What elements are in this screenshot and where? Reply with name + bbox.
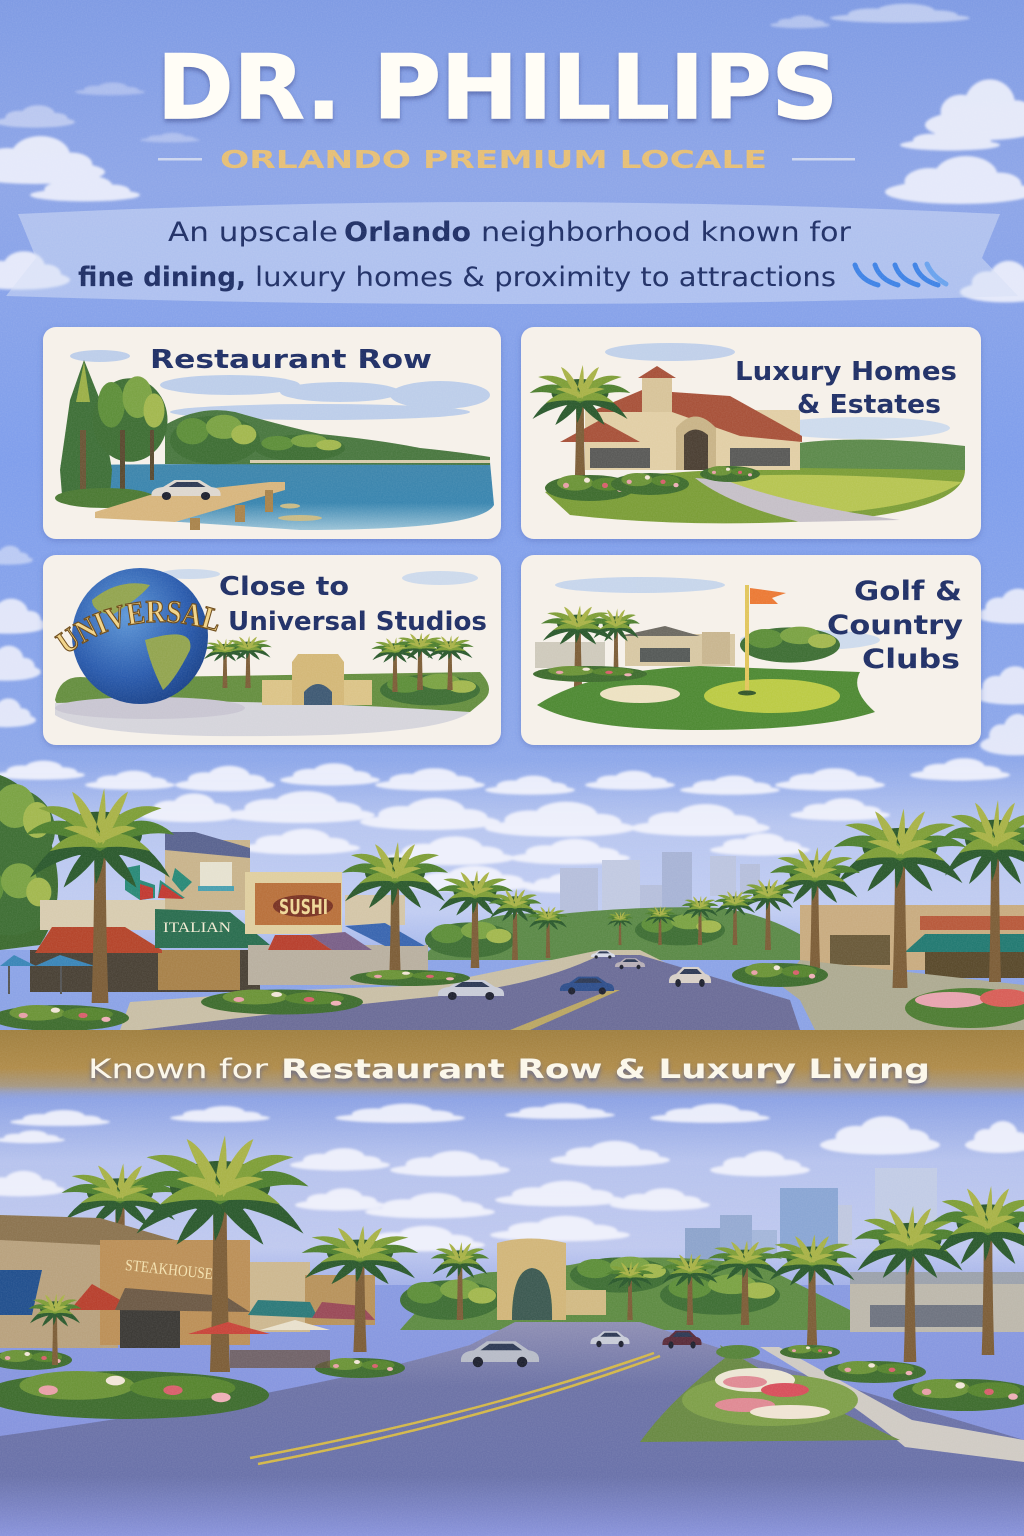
landscaping beds [0, 1294, 1024, 1419]
patio seating [188, 1320, 330, 1368]
title: DR. PHILLIPS [157, 36, 838, 139]
icon: blue waves [855, 264, 946, 285]
shrubs [533, 666, 647, 682]
palms [203, 633, 474, 692]
banner text: Known for [88, 1054, 269, 1085]
panel: Close to Universal Studios: UNIVERSAL [54, 600, 219, 652]
palm trees left [26, 788, 568, 1003]
clouds: side margins [0, 546, 1024, 755]
car on dock [151, 480, 221, 500]
card title: Golf & [854, 576, 962, 607]
background trees [740, 627, 840, 663]
background treeline [400, 1257, 890, 1330]
card title [735, 357, 957, 420]
sand bunker [600, 685, 680, 703]
card title: Close to [219, 572, 349, 602]
distant trees [420, 907, 840, 960]
card title: Clubs [862, 644, 960, 675]
STEAKHOUSE sign: STEAKHOUSE [124, 1257, 214, 1283]
landscaping and flowers [0, 963, 1024, 1031]
lawn [545, 468, 965, 523]
palm trees right [607, 800, 1024, 988]
panel: Close to Universal Studios [40, 555, 503, 749]
intro text: An upscale [168, 217, 338, 248]
card title: Restaurant Row [150, 345, 432, 375]
plaza road [55, 701, 470, 736]
double yellow line [250, 1353, 660, 1464]
gold banner band [0, 1030, 1024, 1100]
park gate arch [262, 654, 372, 705]
sky [555, 577, 880, 650]
panel: Golf & Country Clubs [521, 555, 981, 745]
ITALIAN awning: ITALIAN [163, 920, 231, 936]
road [140, 955, 800, 1030]
cars [461, 1331, 702, 1367]
clouds: upper sky [0, 4, 1024, 302]
background vegetation [380, 674, 480, 705]
palms [541, 606, 640, 690]
banner text: Restaurant Row & Luxury Living [281, 1054, 930, 1085]
road right curb [780, 960, 1024, 1030]
sidewalk [120, 950, 800, 1030]
steakhouse storefront [0, 1215, 375, 1348]
left background trees [0, 775, 58, 950]
UNIVERSAL logo lettering [66, 622, 224, 655]
sky clouds [70, 350, 490, 420]
palm trees left [131, 1135, 489, 1372]
card title [827, 576, 963, 675]
street scene one: Restaurant Row boulevard [0, 758, 1024, 1031]
subtitle: ORLANDO PREMIUM LOCALE [220, 145, 767, 174]
panel: Restaurant Row [43, 327, 501, 539]
flag [738, 585, 786, 696]
card title: Luxury Homes [735, 357, 957, 387]
mansion [560, 366, 802, 470]
city skyline [560, 852, 760, 913]
city towers [685, 1168, 937, 1260]
intro text: luxury homes & proximity to attractions [255, 262, 836, 293]
driveway [695, 478, 900, 522]
intro ribbon banner [6, 202, 1018, 304]
palm tree [530, 365, 630, 495]
patio umbrellas [0, 955, 95, 994]
cars [438, 951, 711, 1000]
left trees [55, 360, 168, 508]
left storefronts [30, 832, 428, 992]
card title [219, 572, 487, 637]
lake water [60, 462, 494, 530]
flower island [640, 1345, 900, 1442]
banner text [88, 1054, 930, 1085]
palm trees right [606, 1186, 1024, 1362]
panel: Luxury Homes & Estates [521, 327, 981, 539]
shrubs [545, 466, 760, 501]
palm behind storefront [62, 1164, 178, 1300]
globe [55, 568, 245, 719]
ground scene [55, 672, 489, 712]
street scene two: steakhouse boulevard [0, 1095, 1024, 1536]
putting green [704, 679, 840, 713]
intro text: Orlando [344, 217, 471, 248]
sky [605, 343, 950, 439]
far tree line [165, 410, 490, 465]
right building [850, 1272, 1024, 1332]
road [0, 1322, 1024, 1536]
intro text: neighborhood known for [481, 217, 852, 248]
card title: & Estates [797, 390, 941, 420]
sky [160, 569, 478, 585]
SUSHI sign: SUSHI [279, 895, 328, 919]
sky clouds [0, 1095, 1024, 1285]
sky clouds [0, 758, 1024, 950]
card title: Universal Studios [228, 607, 487, 637]
card title: Country [827, 610, 963, 641]
fairway [537, 666, 875, 730]
background trees [790, 439, 965, 470]
wooden dock [95, 482, 285, 530]
ITALIAN awning [155, 909, 270, 948]
sidewalk [760, 1347, 1024, 1462]
gate arch [497, 1238, 606, 1320]
intro text [78, 217, 852, 293]
intro text: fine dining, [78, 262, 246, 293]
right storefronts [800, 905, 1024, 978]
rocks [278, 504, 322, 521]
clubhouse [535, 626, 735, 668]
lane markings [510, 990, 620, 1030]
